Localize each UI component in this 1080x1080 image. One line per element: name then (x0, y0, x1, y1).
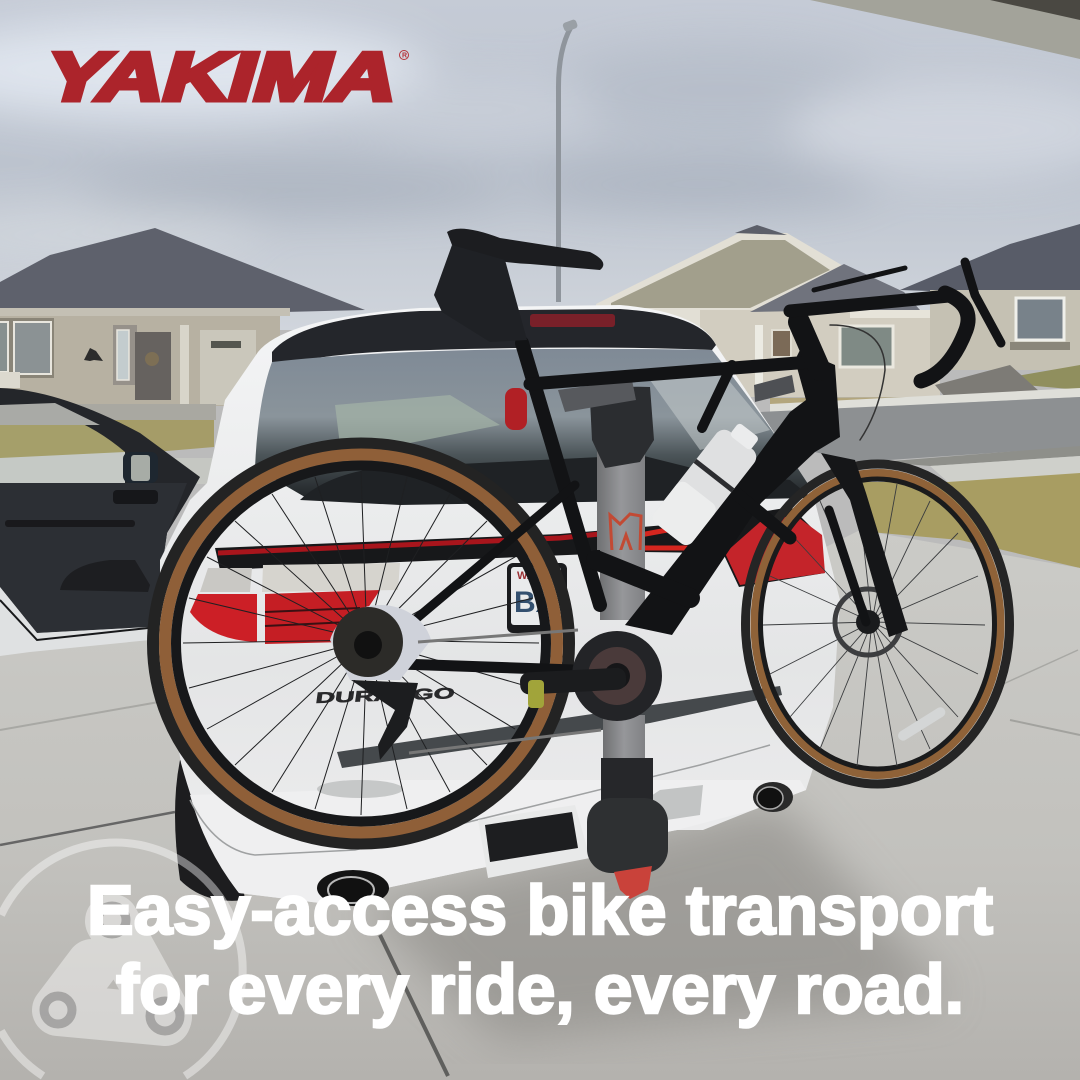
garage roof corner (810, 0, 1080, 59)
bike: frame (385, 262, 1001, 670)
car: bumper step and hitch (314, 685, 793, 906)
logo: Yakima: R (402, 52, 407, 60)
road (760, 397, 1080, 482)
headline line 1: Easy-access bike transport (87, 871, 993, 949)
bike: rack post (558, 375, 795, 899)
car: white body (160, 305, 840, 903)
car: license plate: BX (514, 586, 556, 619)
bike: drivetrain (330, 605, 662, 760)
driveway concrete (0, 530, 1080, 1080)
bike: rear wheel (153, 444, 569, 844)
street lamp (558, 19, 578, 302)
house: left (0, 228, 365, 484)
bike: saddle and bag (434, 229, 603, 342)
headline (87, 871, 993, 1028)
car: taillights (190, 507, 825, 644)
bike: front wheel (746, 464, 1010, 784)
car: spoiler and rear window (255, 309, 812, 505)
car: license plate: WA (517, 570, 535, 582)
bike: water bottle (650, 415, 768, 548)
car: open door (0, 388, 200, 656)
car: bumper step and hitch: DURANGO (314, 685, 456, 707)
bike: red reflector (505, 388, 527, 430)
headline line 2: for every ride, every road. (116, 950, 964, 1028)
icon: bike chain badge (1, 843, 243, 1076)
car: license plate (507, 563, 567, 633)
house: right (596, 224, 1080, 412)
logo: Yakima: YAKIMA (37, 38, 409, 115)
car: rear tire (175, 760, 245, 901)
sky with clouds (0, 0, 1080, 330)
grass (860, 473, 1080, 568)
